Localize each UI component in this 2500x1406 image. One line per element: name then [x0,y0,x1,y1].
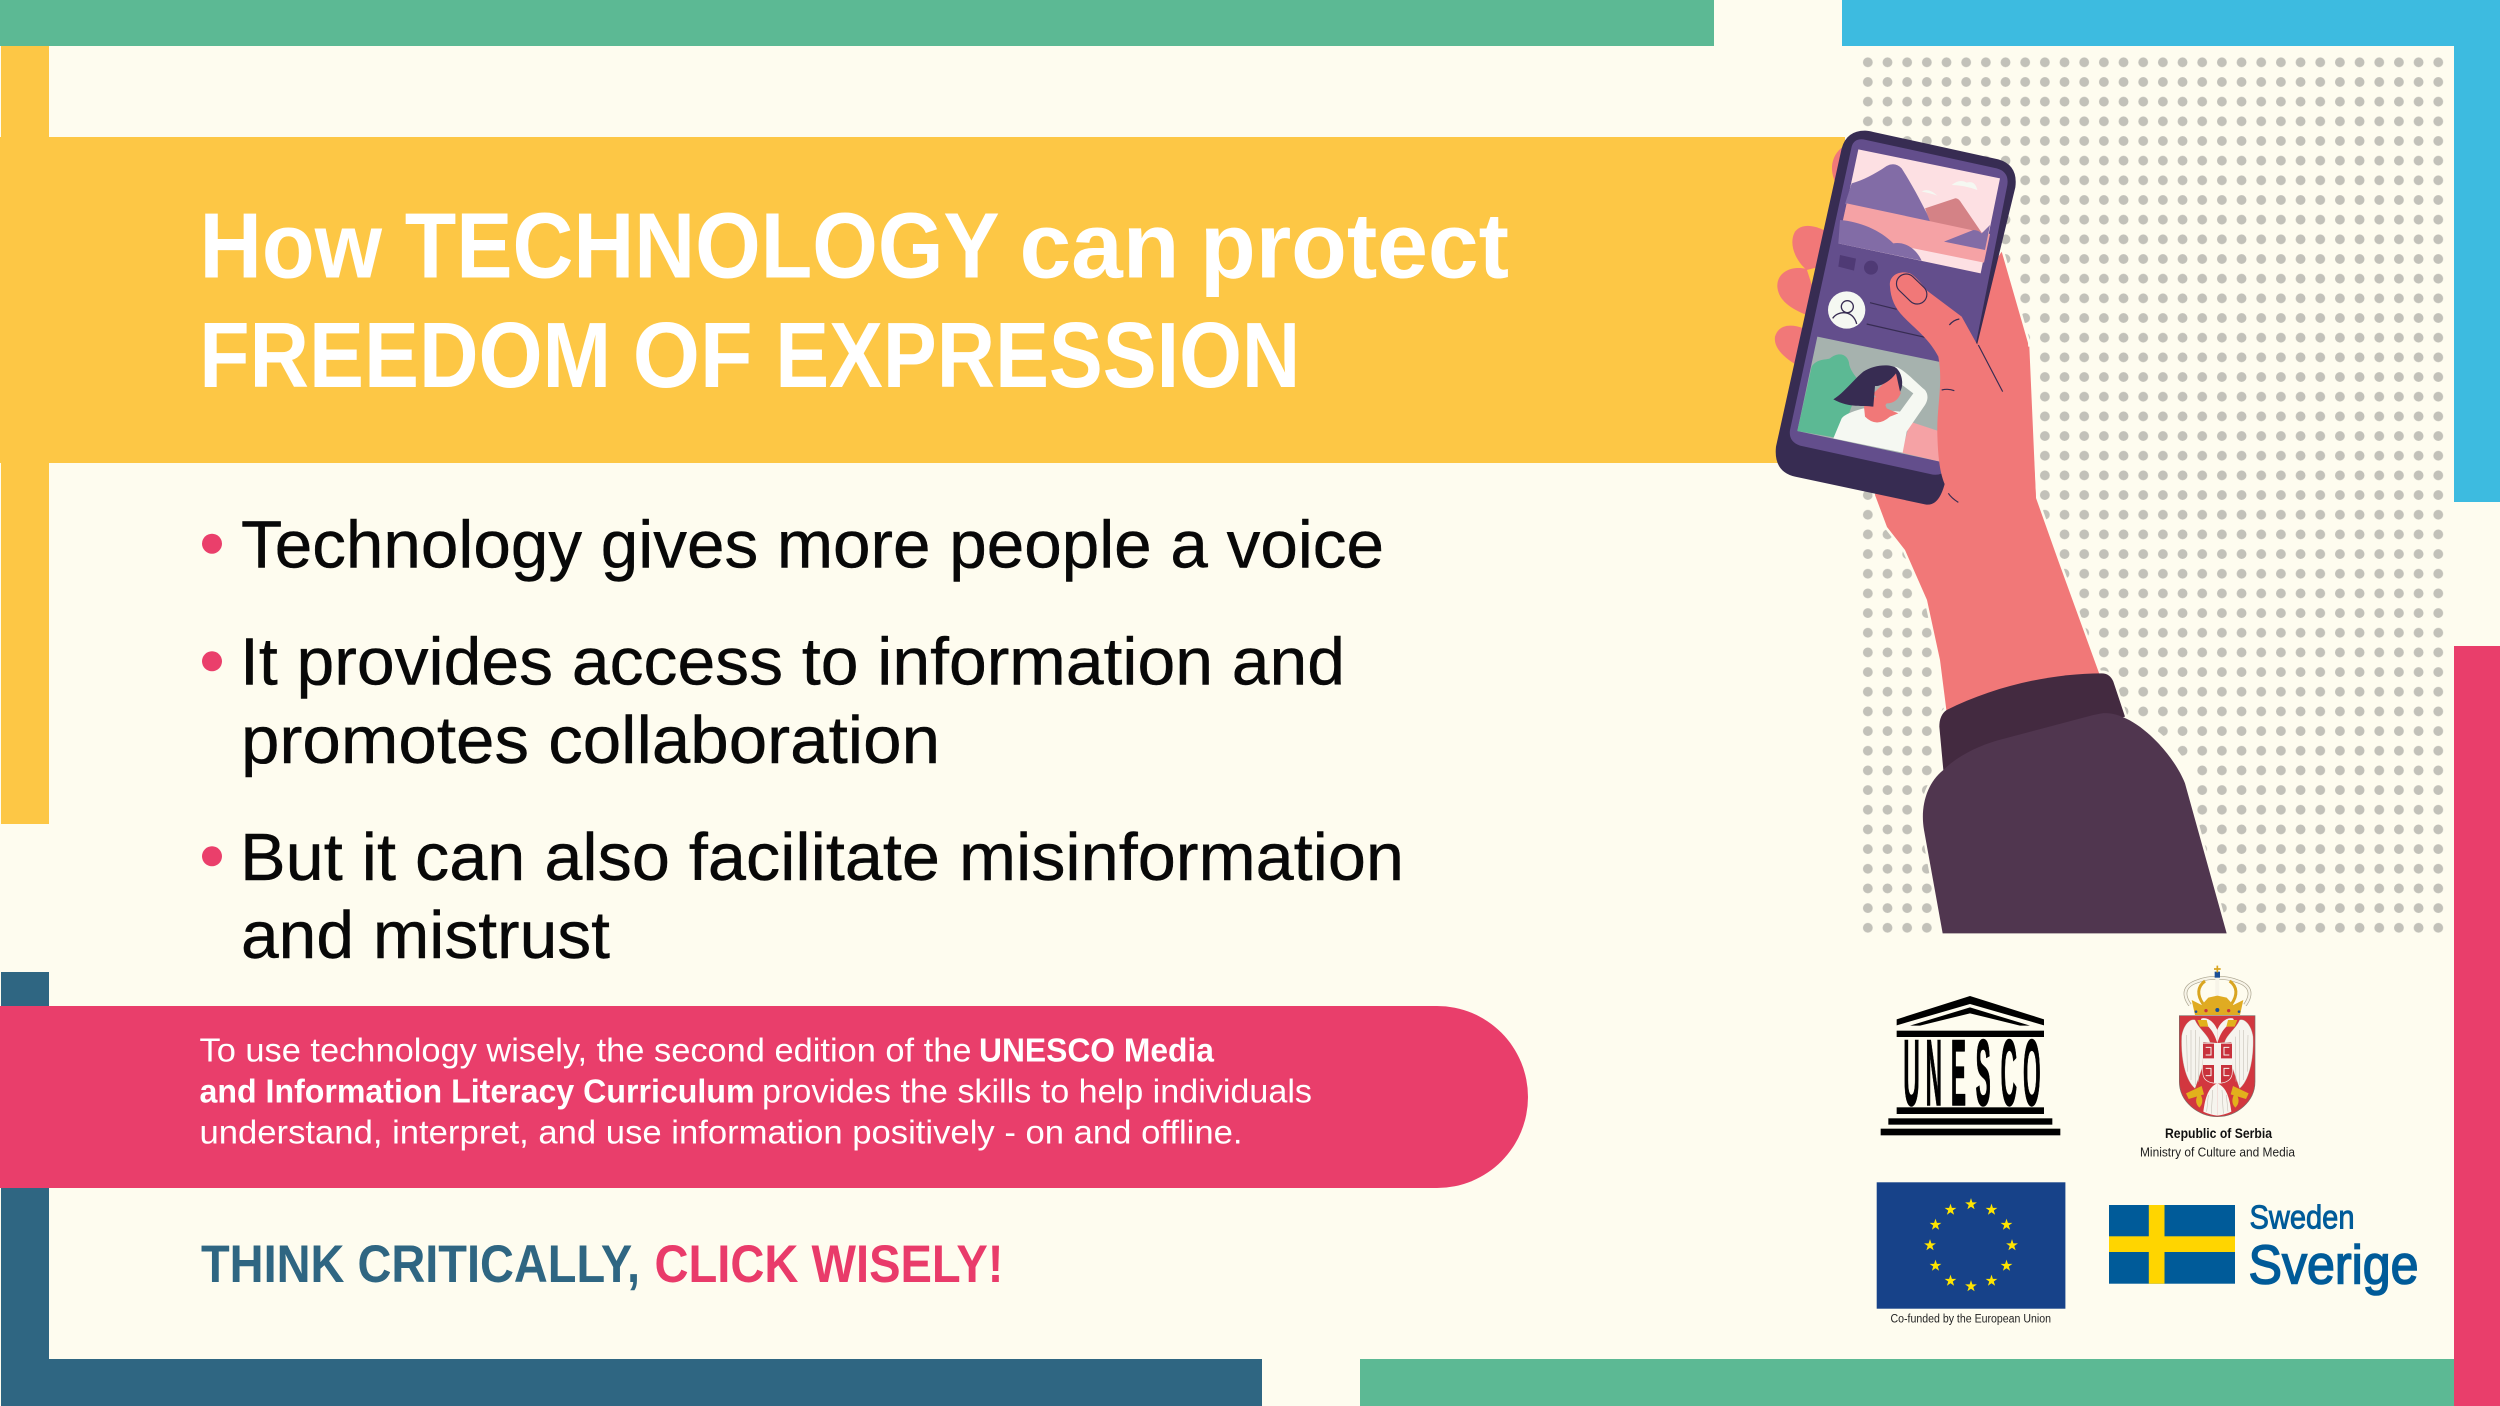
logo: Republic of Serbia: Ministry of Culture and Media [2140,1146,2295,1160]
title text: can [1020,194,1180,298]
arm halo and arm [1875,252,2227,933]
callout text: and Information Literacy Curriculum [200,1074,754,1111]
illustration: hand holding phone [1775,131,2227,933]
bullet 3: But it can also facilitate misinformation [240,821,1404,895]
title text: How [200,194,383,298]
border: pink right bar [2454,646,2500,1406]
border: green bottom bar [1360,1359,2454,1406]
title text: EXPRESSION [775,303,1300,407]
dot pattern panel [1858,52,2448,933]
logo: UNESCO [1881,996,2060,1135]
phone and hand detail [1775,131,2036,517]
callout text: UNESCO Media [979,1033,1214,1070]
screen icons [1838,255,1878,275]
logo: Republic of Serbia [2140,966,2295,1160]
logo: Sweden: Sverige [2248,1233,2418,1295]
callout text: To use technology wisely, the second edition of the [200,1033,972,1070]
callout text: understand, interpret, and use information positively - on and offline. [200,1114,1242,1151]
border: blue top-right bracket [1842,0,2500,502]
tagline: CLICK WISELY! [654,1235,1004,1294]
title text: FREEDOM [199,303,611,407]
thumb nail and creases [1892,270,2003,502]
bullet 2: It provides access to information and [240,626,1345,700]
EU caption: Co-funded by the European Union [1890,1314,2051,1326]
serbia caption: Republic of Serbia [2165,1126,2272,1141]
phone body [1776,131,2016,505]
logo: UNESCO: UNESCO [1903,1023,2041,1126]
tagline [201,1235,1004,1294]
tagline: THINK CRITICALLY, [201,1235,640,1294]
callout text: provides the skills to help individuals [762,1074,1312,1111]
screen image: woman [1797,337,1943,462]
fingers behind phone [1775,147,1953,517]
Swedish flag [2109,1205,2235,1284]
bullet list [202,508,1404,973]
bullet 2: promotes collaboration [241,704,940,778]
thumb [1890,272,2036,502]
title banner [0,137,1845,463]
logo: Sweden [2109,1198,2418,1295]
callout text [200,1033,1312,1151]
EU stars [1924,1198,2018,1291]
screen image: landscape [1838,149,2000,273]
title text: OF [633,303,753,407]
coat of arms [2179,966,2255,1117]
bullet 3 [202,821,1404,973]
border: navy bottom-left bracket [1,972,1262,1406]
pink callout banner [0,1006,1528,1188]
bullet 1: Technology gives more people a voice [241,508,1384,582]
title text: TECHNOLOGY [405,194,1000,298]
sleeve [1923,673,2227,933]
Sweden wordmark: Sweden [2250,1198,2354,1235]
title text [199,194,1509,407]
title text: protect [1200,194,1509,298]
border: green top bar [0,0,1714,46]
logo: EU flag [1877,1182,2065,1326]
bullet 3: and mistrust [241,899,610,973]
border: yellow left bar [1,46,49,824]
bullet 2 [202,626,1345,778]
text lines [1867,303,1925,337]
avatar icon [1828,291,1865,329]
phone bezel [1790,139,2008,475]
